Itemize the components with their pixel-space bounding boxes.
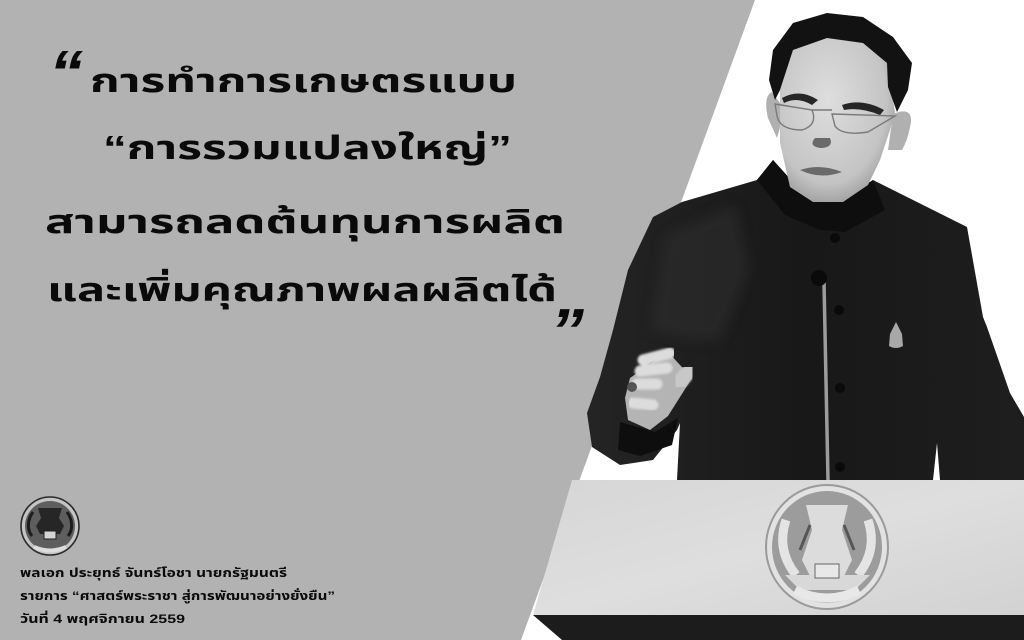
podium top face xyxy=(533,480,1024,615)
icon: small government seal xyxy=(21,497,79,555)
podium dark base xyxy=(533,615,1024,640)
credit line: date: วันที่ 4 พฤศจิกายน 2559 xyxy=(20,610,185,626)
quote line 4: และเพิ่มคุณภาพผลผลิตได้ xyxy=(47,268,557,310)
credit line: programme: รายการ “ศาสตร์พระราชา สู่การพัฒนาอย่างยั่งยืน” xyxy=(20,587,335,604)
jacket sheen xyxy=(660,215,744,334)
cuff xyxy=(618,418,678,456)
eyebrows xyxy=(782,93,884,115)
quote line 2: “การรวมแปลงใหญ่” xyxy=(103,129,512,166)
nose and mouth xyxy=(800,138,842,176)
illustration: speaker portrait xyxy=(587,13,1024,480)
lapel pin xyxy=(889,322,903,348)
hand xyxy=(625,352,692,430)
face xyxy=(780,36,895,202)
quote text block xyxy=(45,39,584,366)
closing quotation mark: ” xyxy=(550,297,584,366)
opening quotation mark: “ xyxy=(49,39,83,108)
panel: grey quote background xyxy=(0,0,755,640)
illustration: podium xyxy=(533,480,1024,640)
quote line 3: สามารถลดต้นทุนการผลิต xyxy=(45,203,565,242)
ears xyxy=(766,92,911,150)
hair xyxy=(769,13,912,112)
jacket and arms xyxy=(587,160,1024,480)
microphone xyxy=(824,282,828,480)
quote line 1: การทำการเกษตรแบบ xyxy=(90,62,517,99)
glasses xyxy=(775,104,895,133)
podium seal xyxy=(766,485,888,609)
collar xyxy=(757,160,885,232)
source credit text xyxy=(20,566,335,626)
jacket buttons xyxy=(830,233,845,472)
credit line: speaker: พลเอก ประยุทธ์ จันทร์โอชา นายกรัฐมนตรี xyxy=(20,566,287,580)
